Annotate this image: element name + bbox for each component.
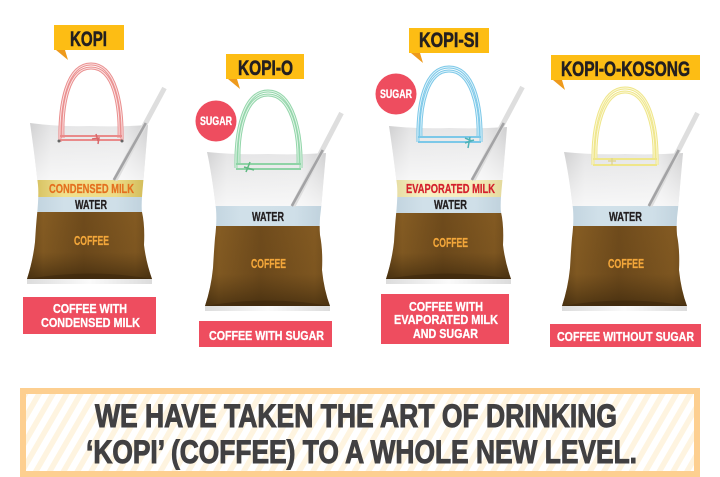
icon: sugar circle: SUGAR [200,116,233,128]
label: water: WATER [434,198,467,212]
icon: straw [649,113,698,206]
caption: coffee without sugar: COFFEE WITHOUT SUGAR [557,329,694,344]
icon: bag kopi-o-kosong [558,88,698,311]
tag: KOPI-O [226,54,304,89]
icon: bag kopi-o [200,91,342,311]
caption: coffee with condensed milk: CONDENSED MILK [41,315,141,330]
banner text: WE HAVE TAKEN THE ART OF DRINKING [95,398,617,434]
caption: coffee with sugar: COFFEE WITH SUGAR [209,328,324,343]
label: coffee: COFFEE [433,236,468,250]
panel: kopi-o [196,54,342,347]
icon: straw [292,113,342,206]
icon: straw [472,87,522,180]
panel: kopi [23,25,164,334]
icon: sugar circle [376,74,416,114]
icon: sugar circle: SUGAR [380,89,413,101]
tag: KOPI-SI: KOPI-SI [419,29,479,52]
tag: KOPI-O: KOPI-O [238,57,293,80]
caption: coffee with condensed milk [23,297,156,334]
icon: pink handle [58,64,124,144]
icon: straw [114,88,164,180]
tag: KOPI-SI [409,28,489,63]
panel: kopi-o-kosong [550,55,701,347]
label: water: WATER [252,210,284,224]
tag: KOPI-O-KOSONG [551,55,700,90]
caption: coffee with sugar [199,321,332,347]
caption: coffee without sugar [550,324,701,347]
caption: coffee with evaporated milk and sugar: AND SUGAR [413,326,478,341]
icon: yellow handle [593,88,657,165]
banner: closing statement [23,391,697,474]
caption: coffee with evaporated milk and sugar: COFFEE WITH [409,299,483,314]
icon: bag kopi [25,64,164,284]
caption: coffee with condensed milk: COFFEE WITH [53,301,127,316]
label: coffee: COFFEE [608,257,644,271]
panel: kopi-si [376,28,522,344]
tag: KOPI [54,25,124,60]
banner text [86,398,637,470]
tag: KOPI: KOPI [70,28,107,51]
icon: sugar circle [196,100,236,142]
caption: coffee with evaporated milk and sugar: EVAPORATED MILK [394,312,499,327]
icon: green handle [236,91,301,172]
label: condensed milk: CONDENSED MILK [49,182,134,196]
label: evaporated milk: EVAPORATED MILK [406,182,495,196]
icon: bag kopi-si [384,67,522,284]
label: coffee: COFFEE [251,257,286,271]
caption: coffee with evaporated milk and sugar [381,294,509,344]
label: coffee: COFFEE [74,234,109,248]
label: water: WATER [75,198,107,212]
label: water: WATER [609,210,642,224]
icon: blue handle [418,67,481,148]
